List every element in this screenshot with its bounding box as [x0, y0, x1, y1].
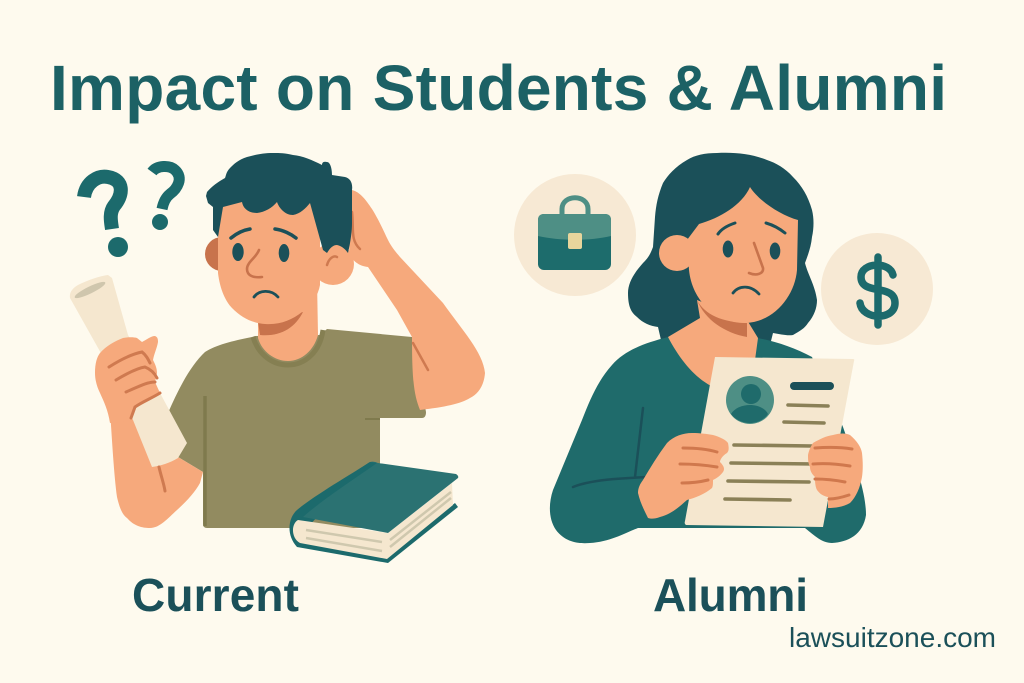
ear: right — [312, 243, 354, 285]
face — [218, 180, 320, 324]
body — [550, 337, 866, 543]
nose — [749, 243, 763, 274]
illustration: current student — [70, 153, 485, 528]
lower arm — [110, 400, 203, 528]
mouth — [254, 291, 278, 297]
label: Current: Current — [132, 569, 299, 621]
shirt — [168, 329, 426, 528]
hair — [206, 153, 352, 253]
hand — [95, 336, 160, 423]
neck shadow — [258, 312, 303, 335]
label: Alumni: Alumni — [653, 569, 808, 621]
icon: question marks — [84, 166, 179, 257]
hair — [628, 153, 817, 345]
icon: briefcase badge — [514, 174, 636, 296]
right hand — [808, 434, 863, 508]
resume lines — [790, 382, 834, 390]
nose — [247, 250, 262, 277]
eyes — [723, 240, 733, 258]
eyebrows — [718, 223, 785, 234]
icon: dollar badge — [821, 233, 933, 345]
title: Impact on Students & Alumni — [50, 52, 947, 124]
eyes — [232, 243, 244, 261]
neck — [668, 300, 758, 387]
collar — [253, 330, 323, 365]
resume photo — [726, 376, 774, 424]
illustration: alumna — [550, 153, 866, 543]
ear — [659, 235, 695, 271]
raised arm — [349, 190, 485, 410]
face — [687, 187, 798, 323]
watermark: lawsuitzone.com: lawsuitzone.com — [789, 622, 996, 653]
mouth — [733, 287, 759, 294]
icon: book — [289, 462, 458, 563]
left hand — [638, 433, 729, 519]
resume paper — [685, 357, 854, 527]
ear: shadowed left — [205, 237, 239, 271]
rolled paper — [70, 275, 187, 467]
eyebrows — [231, 229, 296, 238]
neck — [258, 280, 318, 361]
